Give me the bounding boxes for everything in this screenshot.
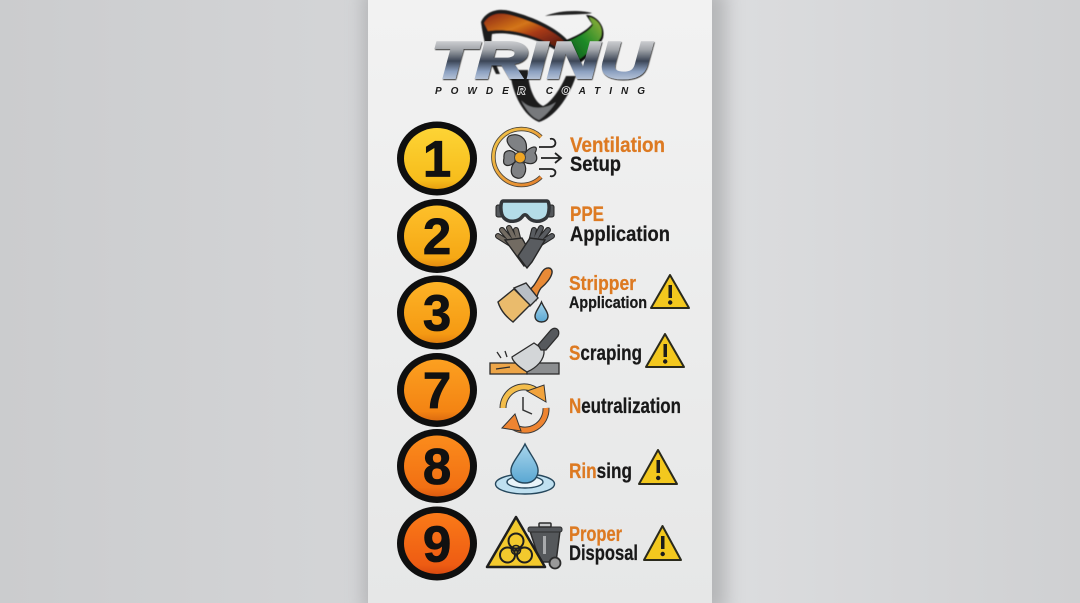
icon: scraper on surface — [490, 328, 559, 374]
number badge 9: 9 — [423, 516, 451, 572]
icon: paint brush and drop — [498, 268, 552, 322]
icon: warning triangle — [639, 450, 677, 484]
logo — [431, 10, 653, 122]
label: Ventilation Setup: Setup — [570, 153, 621, 176]
number badge 3: 3 — [423, 284, 451, 342]
label: Neutralization: Neutralization — [569, 395, 681, 418]
label: Rinsing: Rinsing — [569, 460, 632, 483]
number badge 9 — [397, 506, 477, 580]
label: Proper Disposal: Proper — [569, 523, 622, 546]
number badge 3 — [397, 276, 477, 350]
label: PPE Application — [570, 203, 670, 246]
label: PPE Application: Application — [570, 223, 670, 246]
label: Proper Disposal: Disposal — [569, 542, 638, 565]
step 1 — [397, 122, 665, 196]
number badge 1 — [397, 122, 477, 196]
label: Proper Disposal — [569, 523, 638, 565]
number badge 8 — [397, 429, 477, 503]
icon: warning triangle — [646, 334, 684, 367]
number badge 8: 8 — [423, 438, 451, 495]
step 9 — [397, 506, 681, 580]
label: Ventilation Setup: Ventilation — [570, 134, 665, 157]
step 7 — [397, 353, 681, 431]
icon: goggles and gloves — [496, 201, 554, 268]
label: Stripper Application: Application — [569, 293, 647, 312]
icon: warning triangle — [644, 526, 681, 560]
icon: fan with airflow — [493, 129, 561, 185]
logo tagline: POWDER COATING — [435, 86, 645, 97]
icon: biohazard triangle and bin — [487, 517, 562, 568]
step 8 — [397, 429, 677, 503]
logo wordmark: TRINU — [431, 32, 653, 90]
number badge 7 — [397, 353, 477, 427]
icon: warning triangle — [651, 275, 689, 308]
step 4: scraping — [490, 328, 684, 374]
number badge 2: 2 — [423, 208, 451, 265]
step 3 — [397, 268, 689, 350]
label: PPE Application: PPE — [570, 203, 604, 226]
step 2 — [397, 199, 670, 273]
icon: clock with cycle arrows — [502, 385, 546, 431]
logo emblem — [481, 10, 604, 122]
label: Ventilation Setup — [570, 134, 665, 176]
number badge 2 — [397, 199, 477, 273]
number badge 1: 1 — [423, 130, 451, 188]
number badge 7: 7 — [423, 362, 451, 419]
label: Stripper Application: Stripper — [569, 273, 636, 295]
white panel — [368, 0, 712, 603]
card shadow — [364, 0, 726, 603]
label: Scraping: Scraping — [569, 342, 642, 365]
icon: water drop and ripple — [496, 444, 554, 494]
label: Stripper Application — [569, 273, 647, 312]
